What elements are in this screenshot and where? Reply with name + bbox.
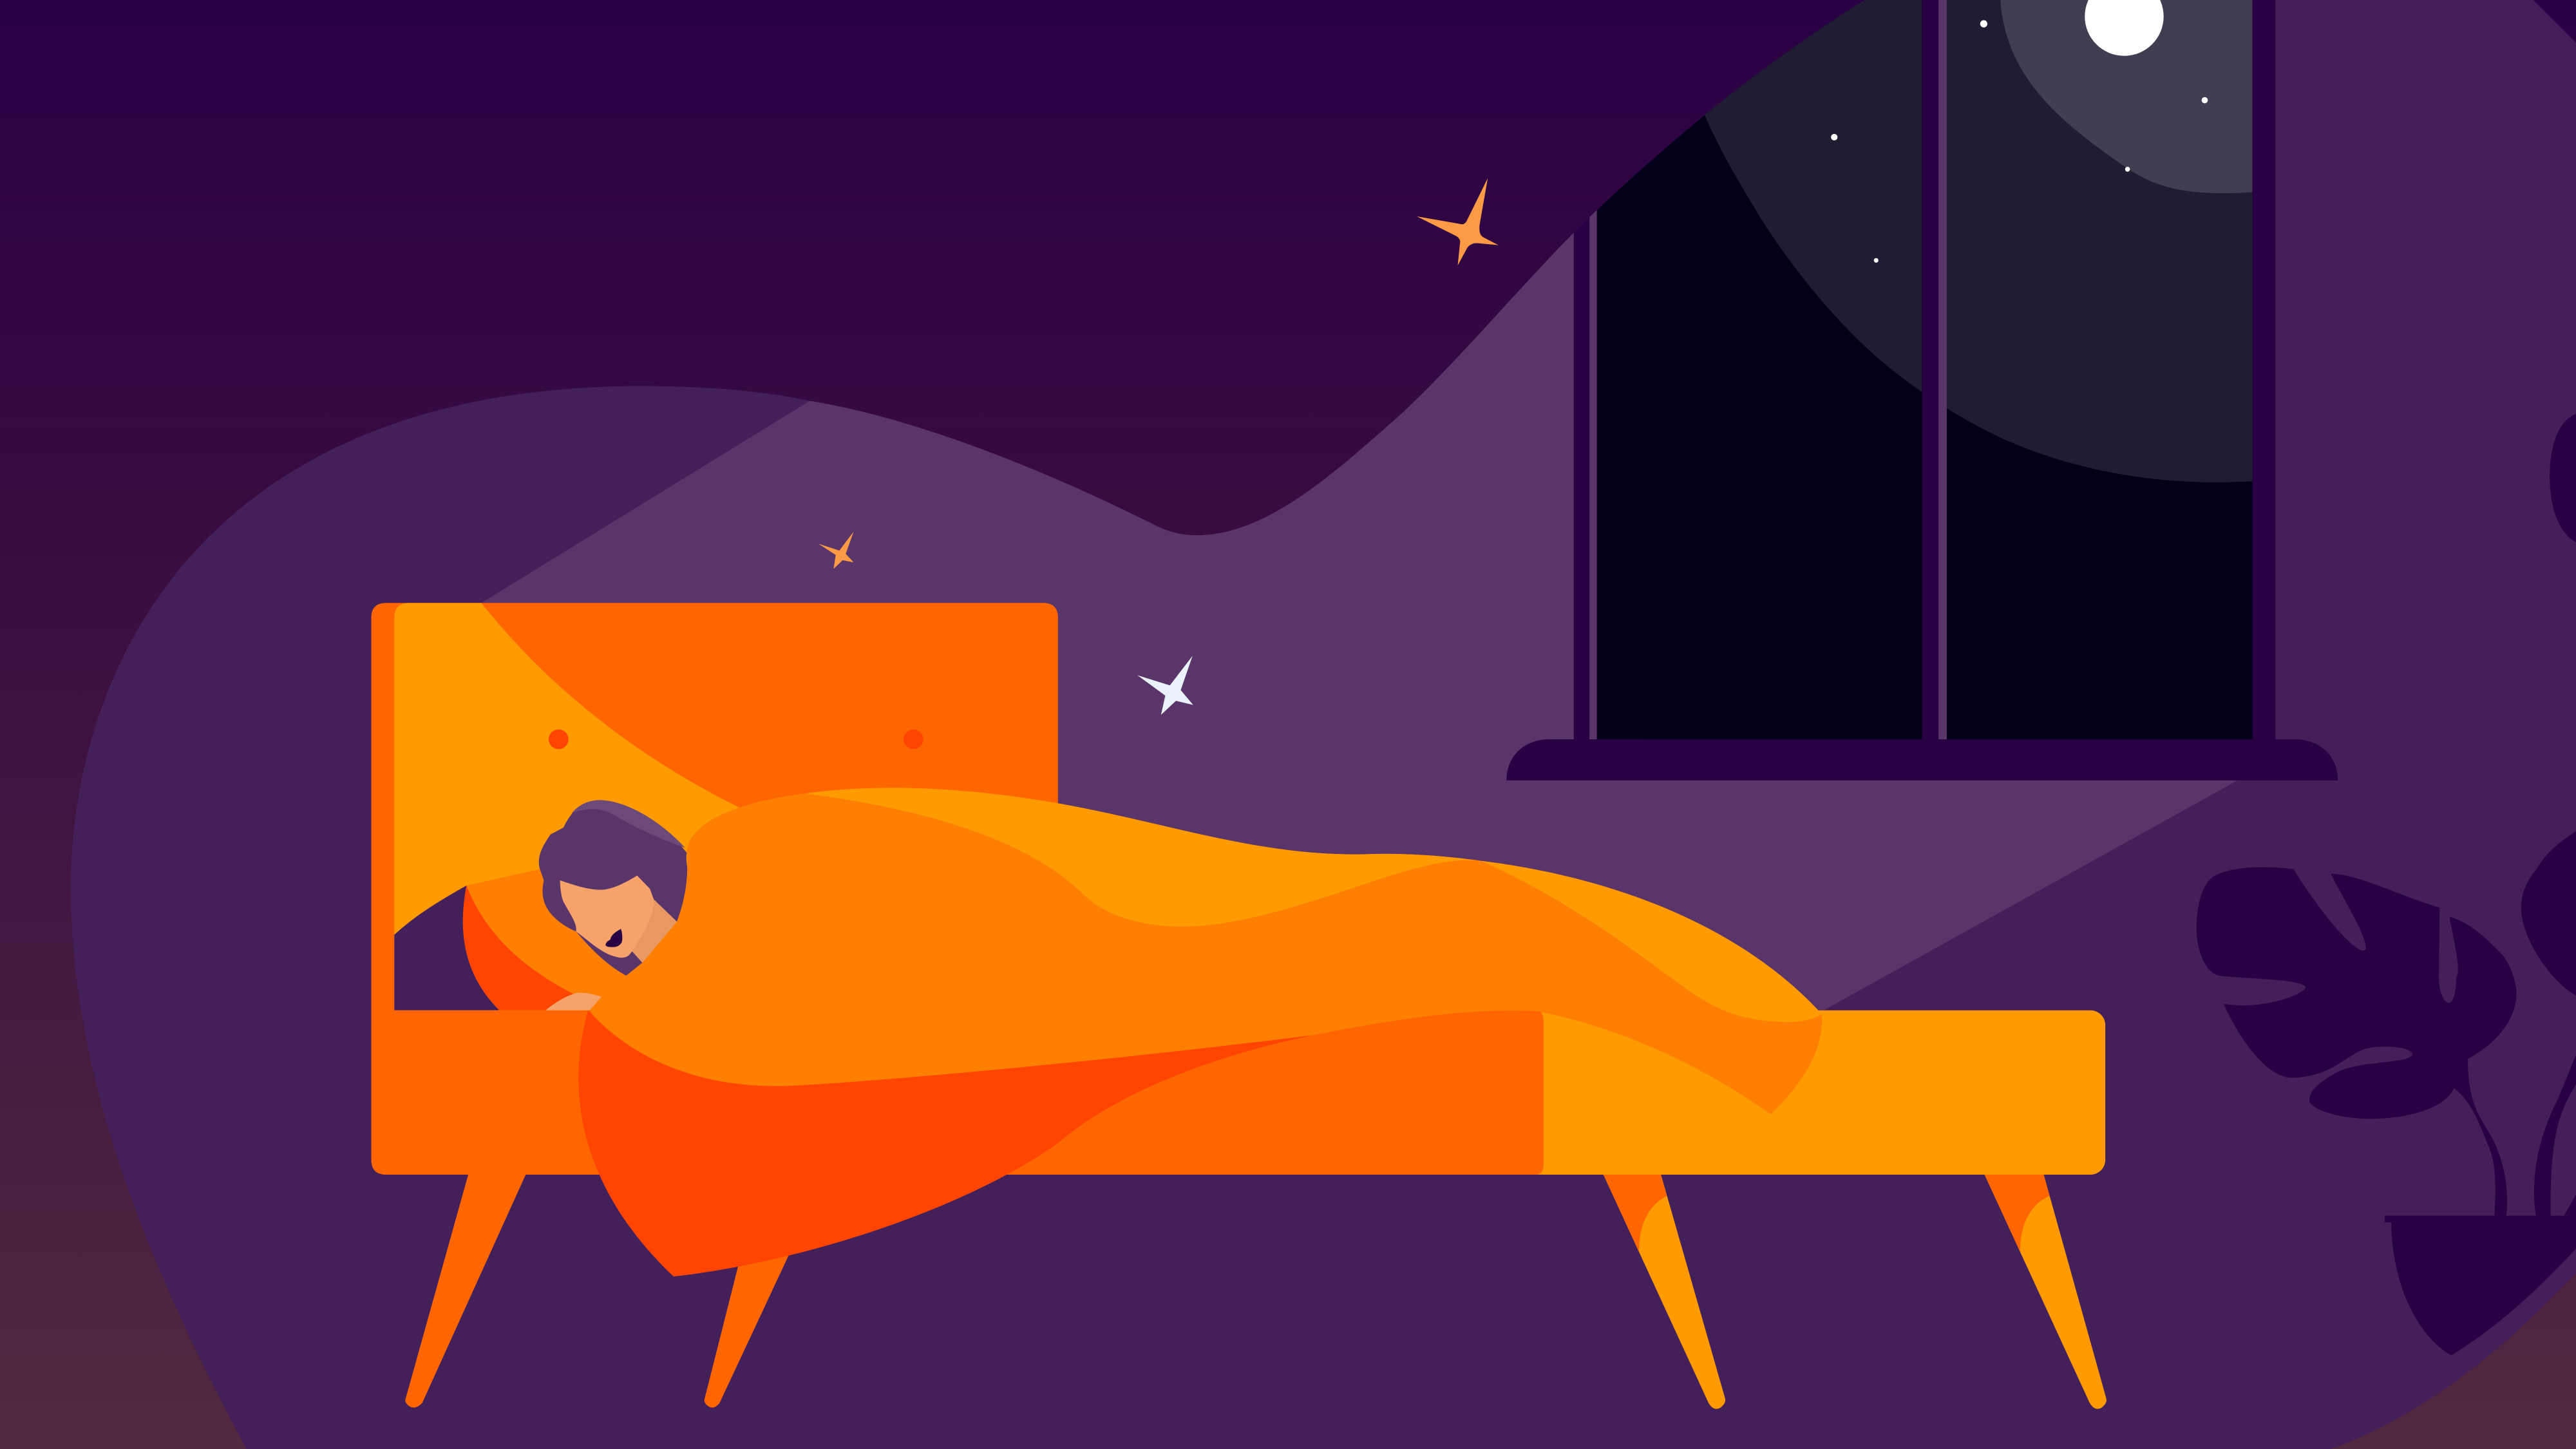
plant [2197,414,2576,1356]
window frame [1574,0,2275,743]
third leaf upper [2550,414,2576,542]
mouth [605,929,622,947]
bed leg 4 [1985,1175,2107,1409]
headboard [372,603,1058,1019]
blanket top highlight [805,788,1822,1022]
window glass [1574,0,2275,739]
pot [2385,1216,2576,1356]
bed base orange section [372,1010,1544,1175]
window sill [1506,739,2338,781]
large monstera leaf and stem [2197,867,2517,1216]
bed leg 1 [405,1175,526,1408]
hair highlight [572,800,685,848]
bed leg 3 [1604,1175,1725,1409]
second leaf [2521,831,2576,996]
moonlight beam [481,164,2237,1019]
blanket [578,788,1822,1276]
stems [2534,1055,2576,1216]
face [560,875,677,963]
headboard button right [904,730,923,749]
moon halo inner [2000,0,2253,193]
woman's head [539,800,688,976]
hair [539,800,688,976]
headboard button left [549,730,569,749]
sparkle: small orange [819,532,854,569]
window [1574,0,2300,743]
sparkle: white [1137,656,1193,715]
bed leg 2 [705,1249,792,1408]
bed base [372,1010,2105,1175]
stars in window [1831,20,2208,263]
neck shadow [632,900,677,963]
hand [545,993,601,1010]
moon halo outer [1692,0,2300,482]
moon [2085,0,2164,56]
pillow [394,869,641,1010]
blanket underside [578,1010,1314,1276]
sparkle: large orange [1417,178,1499,265]
blanket main [590,788,1822,1114]
bed [372,603,2107,1409]
